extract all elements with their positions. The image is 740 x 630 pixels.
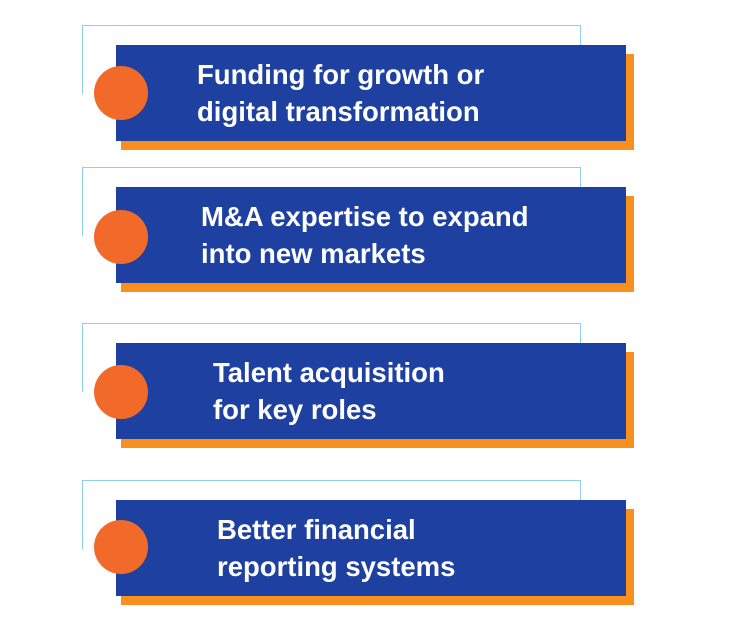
text: funding: Funding for growth or: [197, 59, 484, 90]
icon: orange dot: [94, 520, 148, 574]
icon: orange dot: [94, 66, 148, 120]
text: reporting: reporting systems: [217, 551, 455, 582]
card: reporting: [82, 480, 634, 605]
card: talent: [82, 323, 634, 448]
text: M&A: M&A expertise to expand: [201, 201, 529, 232]
text: reporting: [217, 514, 455, 582]
text: funding: [197, 59, 484, 127]
icon: orange dot: [94, 365, 148, 419]
text: funding: digital transformation: [197, 96, 480, 127]
text: talent: [213, 357, 445, 425]
text: reporting: Better financial: [217, 514, 416, 545]
card: M&A: [82, 167, 634, 292]
text: talent: Talent acquisition: [213, 357, 445, 388]
icon: orange dot: [94, 210, 148, 264]
text: talent: for key roles: [213, 394, 377, 425]
text: M&A: [201, 201, 529, 269]
text: M&A: into new markets: [201, 238, 426, 269]
card: funding: [82, 25, 634, 150]
